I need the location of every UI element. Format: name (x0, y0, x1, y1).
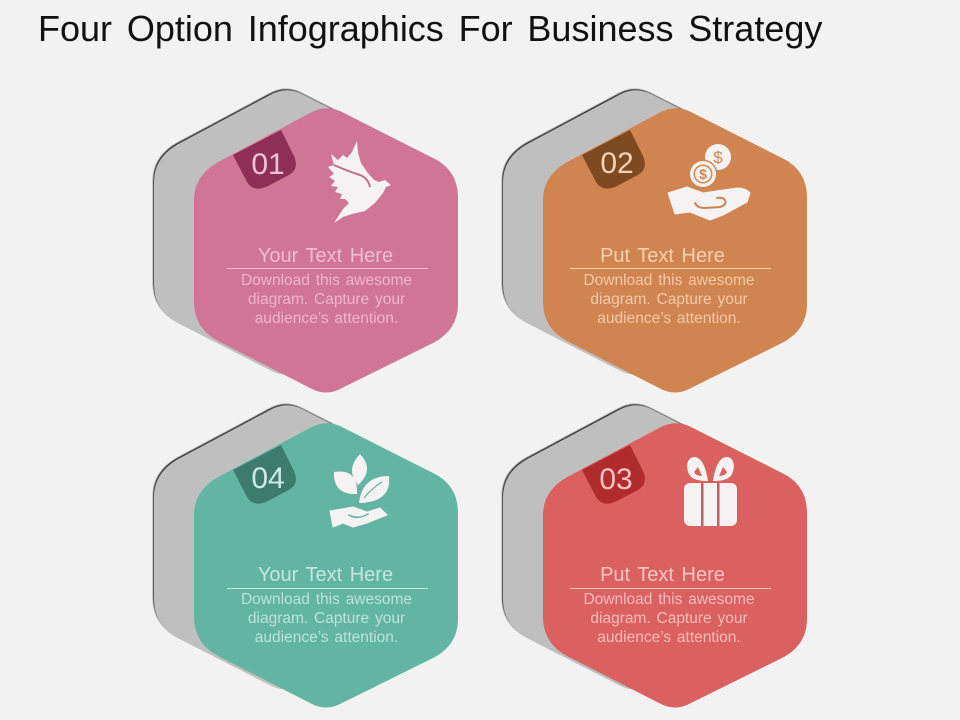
divider (570, 588, 771, 589)
number tab (233, 445, 296, 504)
number tab (582, 130, 645, 189)
body text: audience’s attention. (597, 310, 741, 327)
back hexagon shadow (153, 89, 417, 373)
back hexagon (503, 405, 767, 690)
body text (241, 591, 412, 646)
number tab (582, 445, 645, 504)
icon: hand with coins: $ (713, 148, 723, 167)
back hexagon (154, 90, 418, 374)
body text: diagram. Capture your (590, 610, 748, 627)
heading: Your Text Here (258, 564, 393, 586)
heading: Put Text Here (600, 564, 725, 586)
body text: Download this awesome (583, 591, 755, 608)
number: 01 (251, 148, 285, 181)
back hexagon (503, 90, 767, 374)
icon: gift box (684, 457, 737, 526)
back hexagon shadow (153, 404, 417, 688)
number: 02 (600, 147, 634, 180)
body text: diagram. Capture your (590, 291, 748, 308)
icon: hand with coins: $ (699, 166, 707, 182)
number: 03 (599, 463, 633, 496)
heading: Your Text Here (258, 245, 393, 267)
back hexagon shadow (502, 404, 766, 688)
number tab (233, 130, 296, 189)
divider (227, 268, 428, 269)
panel: option 01 (153, 89, 458, 393)
heading: Put Text Here (600, 245, 725, 267)
divider (227, 588, 428, 589)
front hexagon (543, 108, 807, 392)
body text: Download this awesome (583, 272, 755, 289)
body text: Download this awesome (241, 272, 412, 289)
body text (583, 591, 755, 646)
number: 04 (251, 462, 285, 495)
front hexagon (543, 423, 807, 708)
back hexagon (154, 405, 418, 690)
panel: option 02 (502, 89, 807, 393)
back hexagon shadow (502, 89, 766, 373)
body text: diagram. Capture your (248, 610, 405, 627)
icon: hand with leaves (330, 454, 389, 527)
body text: Download this awesome (241, 591, 412, 608)
front hexagon (194, 108, 458, 392)
body text: audience’s attention. (597, 629, 741, 646)
body text: audience’s attention. (255, 629, 398, 646)
front hexagon (194, 423, 458, 708)
icon: hand with coins (668, 144, 750, 220)
panel: option 03 (502, 404, 807, 708)
title: Four Option Infographics For Business Strategy (38, 8, 822, 49)
body text (583, 272, 755, 327)
icon: dove (328, 141, 391, 223)
panel: option 04 (153, 404, 458, 708)
divider (570, 268, 771, 269)
body text: diagram. Capture your (248, 291, 405, 308)
body text (241, 272, 412, 327)
body text: audience’s attention. (255, 310, 398, 327)
